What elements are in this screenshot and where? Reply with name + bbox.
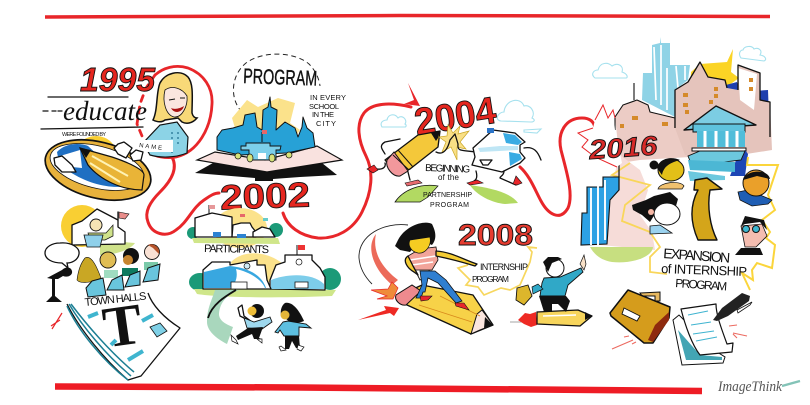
green hills	[395, 185, 438, 202]
panel: 2002 participants	[187, 175, 341, 351]
label: participants: PARTICIPANTS	[204, 243, 269, 256]
illustration: pencil and pie	[39, 130, 157, 210]
year 2002: 2002	[219, 175, 311, 218]
boy on pencil	[510, 255, 592, 327]
documents and pen	[673, 293, 752, 365]
year 2016 with burst: 2016	[587, 130, 659, 165]
panel: program in every school	[195, 54, 346, 181]
heading: program: PROGRAM	[243, 65, 318, 91]
clouds	[593, 46, 766, 78]
year 2008: 2008	[458, 219, 533, 252]
caption: beginning of the partnership program: BEGINNING	[425, 163, 470, 176]
caption: internship program	[472, 262, 528, 284]
caption: in every school in the city	[309, 93, 346, 128]
school building	[241, 143, 281, 160]
caption: beginning of the partnership program: PROGRAM	[430, 202, 469, 209]
big pencil	[396, 285, 493, 334]
caption: in every school in the city: CITY	[316, 119, 336, 128]
label: town halls: TOWN HALLS	[84, 291, 147, 309]
caption: internship program: PROGRAM	[472, 274, 509, 284]
caption: in every school in the city: IN THE	[312, 110, 334, 119]
speech bubble	[45, 243, 79, 268]
caption: were founded by: WERE FOUNDED BY	[62, 132, 106, 138]
caption: expansion of internship program: of INTERNSHIP	[661, 261, 747, 279]
skyline and museum	[615, 37, 772, 181]
pink zone and yellow zigzag	[590, 155, 778, 290]
running students	[231, 303, 311, 351]
caption: expansion of internship program: EXPANSION	[663, 245, 731, 266]
newspaper	[67, 291, 180, 380]
microphone	[46, 267, 72, 302]
panel: town halls	[45, 205, 180, 380]
heading: educate: educate	[63, 96, 147, 126]
pop-up book	[195, 146, 342, 181]
audience	[77, 244, 160, 297]
red arrow	[358, 306, 399, 320]
face: boy	[738, 170, 772, 206]
briefcase	[610, 290, 670, 349]
signature: ImageThink: ImageThink	[717, 379, 782, 395]
faces	[632, 158, 772, 255]
name tag: NAME	[139, 143, 162, 152]
face: woman with bun	[650, 158, 684, 189]
clouds	[381, 100, 541, 133]
caption: expansion of internship program: PROGRAM	[675, 276, 728, 294]
caption: internship program: INTERNSHIP	[480, 262, 528, 272]
yellow burst outline	[458, 247, 537, 295]
bottom border line	[55, 386, 702, 391]
gold growth arrow	[692, 178, 722, 240]
year 1995: 1995	[80, 61, 156, 98]
panel: 2008 internship	[358, 219, 592, 334]
large schools row	[189, 245, 341, 297]
panel: 2016 expansion	[578, 37, 778, 365]
caption: expansion of internship program	[661, 245, 747, 294]
small schools row	[187, 205, 283, 248]
caption: in every school in the city: SCHOOL	[309, 102, 339, 111]
panel: 2004 partnership	[367, 90, 541, 209]
panel: 1995 educate	[39, 61, 197, 210]
New York Times T logo: T	[99, 291, 146, 360]
year 2016 with burst	[578, 105, 659, 167]
pencil character	[367, 131, 440, 186]
caption: beginning of the partnership program	[423, 163, 472, 209]
caption: beginning of the partnership program: of the	[438, 173, 460, 182]
red timeline ribbon	[137, 66, 595, 238]
caption: beginning of the partnership program: PARTNERSHIP	[423, 192, 472, 199]
face: girl with dark hair	[632, 192, 680, 234]
top border line	[45, 16, 770, 17]
blue tower	[581, 177, 619, 245]
woman with name tag	[130, 73, 197, 161]
swoosh and flame	[359, 225, 408, 299]
building character	[467, 128, 541, 185]
path from school	[207, 290, 239, 344]
dashed arc with arrow	[233, 54, 320, 112]
caption: in every school in the city: IN EVERY	[310, 93, 346, 102]
girl on pencil	[395, 223, 477, 310]
year 2004: 2004	[412, 90, 499, 144]
face: man with glasses	[735, 216, 767, 255]
city skyline with sunburst	[217, 97, 315, 162]
high-five burst	[439, 125, 469, 160]
